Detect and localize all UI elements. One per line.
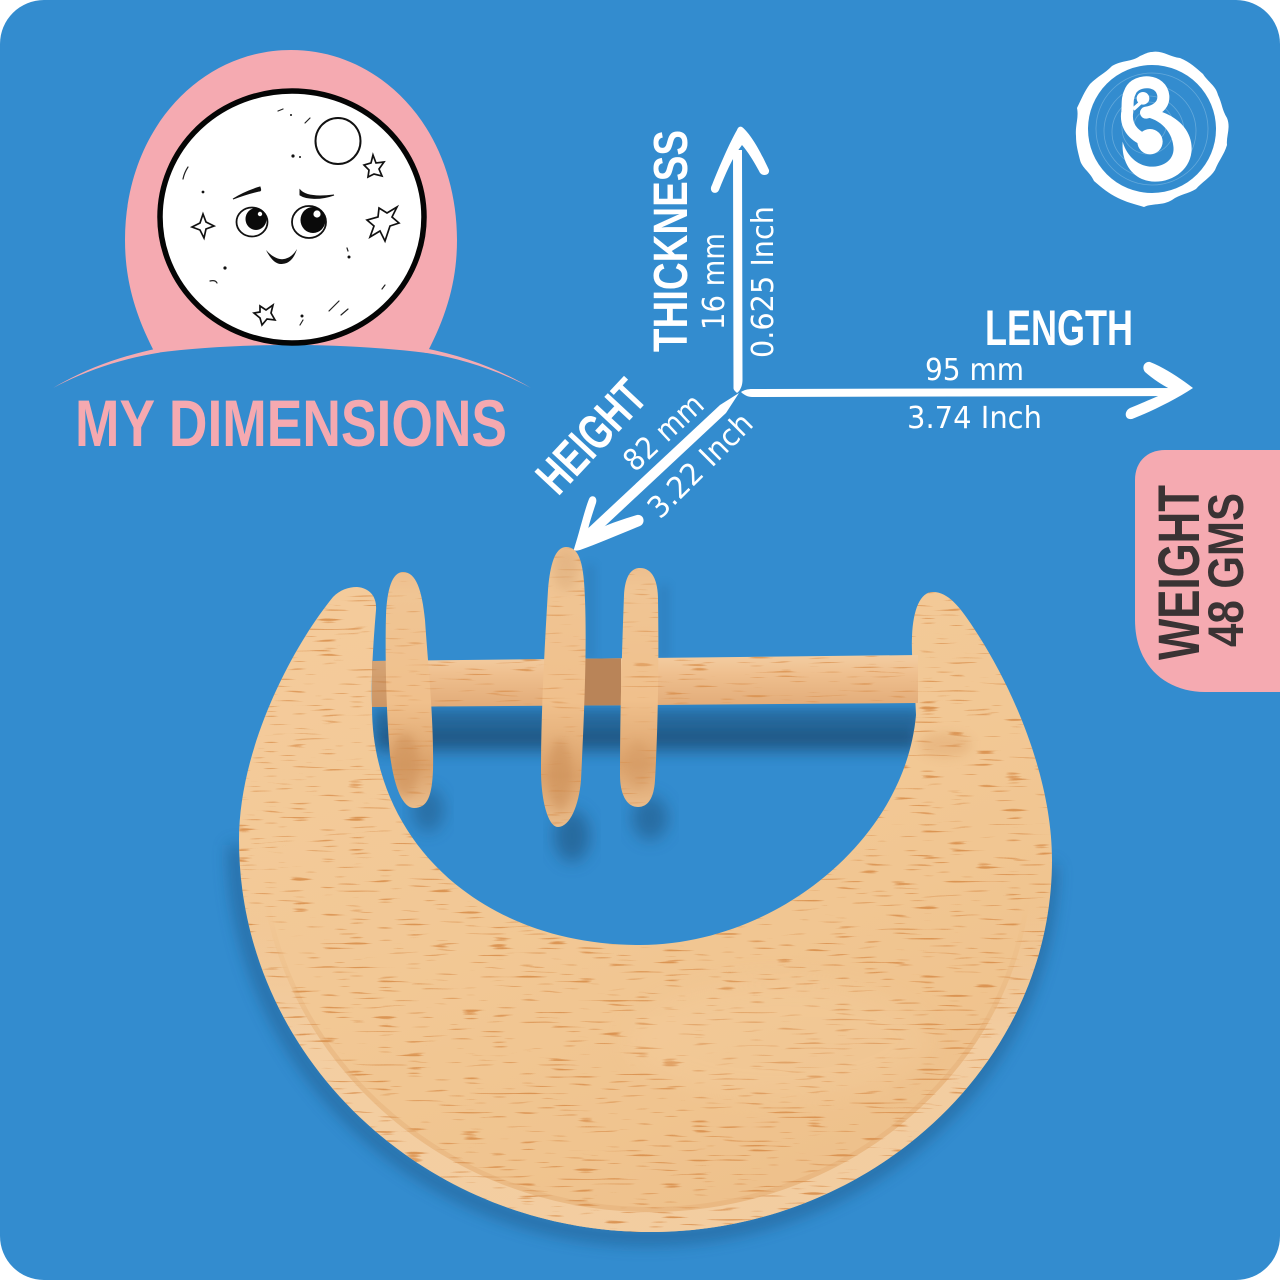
weight label: WEIGHT [1147, 485, 1212, 660]
product: wooden moon rattle [235, 540, 1055, 1237]
tab background [1135, 450, 1280, 692]
weight tab [1135, 450, 1280, 692]
rod shaded section [583, 655, 621, 710]
pink hood shape [125, 50, 457, 353]
label: 3.74 inch: 3.74 Inch [907, 401, 1042, 436]
stars [192, 155, 399, 325]
label: 3.22 inch: 3.22 Inch [641, 406, 760, 526]
disc 1 [380, 565, 440, 815]
label: 16 mm: 16 mm [697, 233, 732, 330]
logo blue disc [1088, 65, 1216, 193]
crater [316, 118, 360, 164]
pink horizon swoosh [53, 348, 531, 388]
label: height: HEIGHT [525, 368, 657, 505]
product shadows [236, 565, 1049, 1237]
label: 0.625 inch: 0.625 Inch [746, 206, 781, 358]
moon character [160, 91, 424, 343]
left eyebrow [233, 187, 261, 199]
surface specks [183, 109, 385, 325]
label: length: LENGTH [985, 300, 1133, 356]
label: thickness: THICKNESS [645, 130, 698, 352]
arrow: thickness [711, 127, 769, 393]
disc 3 [615, 560, 663, 815]
logo torn white ring [1076, 52, 1229, 207]
header badge: my dimensions [53, 50, 531, 460]
right eyebrow [300, 190, 334, 198]
bevel edge [270, 985, 1027, 1232]
disc 2 [535, 540, 591, 835]
right eye [292, 206, 326, 238]
smile [266, 249, 297, 264]
label: 95 mm: 95 mm [925, 353, 1024, 388]
heading: my dimensions: MY DIMENSIONS [75, 386, 507, 460]
weight value: 48 GMS [1198, 493, 1254, 647]
moon face disc [160, 91, 424, 343]
logo swirl glyph [1123, 82, 1192, 182]
logo tree rings [1096, 73, 1208, 185]
rod [370, 650, 920, 710]
arrow: length [741, 362, 1193, 419]
left eye [236, 208, 268, 236]
arrow: height [574, 393, 739, 551]
logo badge [1076, 52, 1229, 207]
crescent body [235, 585, 1055, 1235]
label: 82 mm: 82 mm [617, 387, 711, 479]
